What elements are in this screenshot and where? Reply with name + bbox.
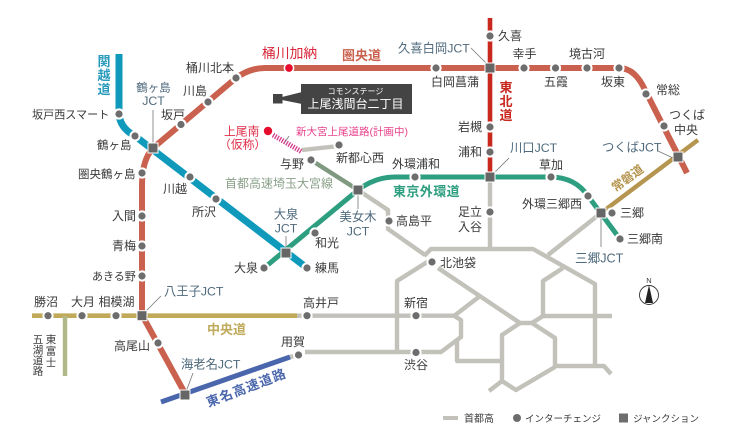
legend: ジャンクション	[633, 414, 699, 425]
interchange labels: 川島	[183, 83, 207, 98]
line: Tohoku Expressway	[488, 18, 492, 177]
interchange labels: あきる野	[92, 270, 136, 283]
route names: 関	[97, 54, 111, 69]
line: Kan-Etsu Expressway	[119, 54, 307, 268]
interchange labels: 大泉	[234, 261, 258, 275]
route names: 越	[97, 68, 111, 83]
route names: 路	[33, 364, 44, 378]
interchange labels: 久喜	[498, 29, 522, 43]
junction labels: つくばJCT	[602, 140, 662, 154]
junction labels: JCT	[142, 94, 165, 108]
route names: 道	[97, 82, 111, 97]
route names: 富	[46, 344, 56, 358]
junction labels: 大泉	[274, 206, 298, 222]
junction labels	[136, 40, 662, 372]
route names: 中央道	[207, 322, 246, 337]
junction labels: 久喜白岡JCT	[398, 40, 470, 56]
interchange labels: 三郷南	[627, 231, 663, 246]
interchange labels: 外環浦和	[392, 157, 440, 171]
interchange labels: 和光	[315, 236, 339, 250]
interchange markers	[43, 31, 669, 360]
interchange labels: 高島平	[396, 213, 432, 228]
interchange labels: 坂東	[601, 75, 625, 89]
interchange labels: 新宿	[404, 296, 428, 310]
route names: 士	[46, 356, 56, 369]
interchange labels: 圏央鶴ヶ島	[78, 167, 136, 181]
interchange labels: 中央	[674, 122, 698, 137]
callout: Common Stage Ageo Asamadai 2-chome	[273, 84, 412, 114]
interchange labels: 三郷	[620, 206, 644, 220]
interchange labels: 相模湖	[98, 294, 135, 309]
legend	[443, 412, 699, 425]
route names: 道	[499, 108, 513, 123]
interchange labels: 岩槻	[458, 119, 482, 134]
line: Tomei Expressway	[161, 357, 290, 402]
interchange labels: 川越	[163, 182, 187, 196]
icon: north compass: N	[646, 276, 652, 285]
leader lines	[146, 48, 673, 392]
marker: Ageo-Minami IC	[264, 127, 272, 135]
route names: 首都高速埼玉大宮線	[225, 176, 333, 190]
interchange labels: 入間	[112, 209, 136, 223]
red and pink labels: 上尾南	[224, 124, 260, 138]
junction labels: JCT	[347, 224, 370, 238]
interchange labels: 境古河	[569, 46, 605, 61]
interchange labels: 高尾山	[114, 339, 150, 353]
interchange labels: 入谷	[458, 220, 482, 234]
junction labels: 美女木	[340, 210, 376, 224]
route names: 東京外環道	[393, 184, 460, 199]
icon: north compass	[640, 276, 658, 304]
legend: インターチェンジ	[525, 414, 601, 425]
line: Joban Expressway	[601, 140, 698, 213]
line: Ken-O Expressway	[142, 68, 687, 397]
interchange labels: 渋谷	[404, 358, 428, 372]
junction labels: 鶴ヶ島	[136, 80, 171, 94]
interchange labels: 常総	[656, 82, 680, 97]
route names: 圏央道	[342, 48, 381, 63]
interchange labels: 坂戸西スマート	[32, 108, 109, 122]
interchange labels: 北池袋	[440, 256, 476, 270]
legend: 首都高	[464, 412, 494, 425]
junction labels: JCT	[275, 222, 298, 236]
route names: 東	[499, 80, 513, 95]
interchange labels: 青梅	[112, 239, 136, 253]
junction labels: 川口JCT	[510, 141, 558, 155]
interchange labels: つくば	[669, 108, 705, 122]
red and pink labels: 桶川加納	[262, 46, 317, 61]
interchange labels: 新都心西	[336, 151, 384, 165]
route names: 東名高速道路	[204, 366, 289, 410]
line: Tokyo Gaikan	[264, 177, 620, 268]
interchange labels: 外環三郷西	[522, 197, 582, 211]
route names: 道	[33, 354, 44, 367]
line: Saitama Omiya route	[311, 160, 358, 190]
junction labels: 海老名JCT	[181, 356, 241, 372]
interchange labels: 用賀	[281, 335, 305, 349]
interchange labels: 鶴ヶ島	[97, 138, 132, 152]
junction labels: 八王子JCT	[164, 284, 224, 298]
interchange labels: 幸手	[512, 47, 537, 61]
interchange labels: 桶川北本	[186, 60, 234, 75]
interchange labels: 練馬	[315, 261, 339, 275]
red and pink labels	[219, 46, 408, 152]
interchange labels: 勝沼	[34, 294, 58, 309]
interchange labels: 五霞	[544, 75, 568, 89]
route names: 東	[46, 334, 56, 346]
callout: Common Stage Ageo Asamadai 2-chome: 上尾浅間台二丁目	[307, 96, 404, 111]
interchange labels: 白岡菖蒲	[431, 74, 479, 89]
marker: Okegawa-Kano IC	[284, 63, 294, 73]
interchange labels: 坂戸	[161, 108, 185, 122]
interchange labels: 草加	[539, 158, 563, 172]
interchange labels: 浦和	[458, 145, 482, 159]
route names: 湖	[33, 344, 43, 356]
interchange labels: 足立	[458, 205, 482, 219]
route names	[33, 48, 646, 410]
interchange labels: 大月	[71, 295, 95, 309]
line: Chuo Expressway	[32, 313, 297, 318]
interchange labels	[32, 29, 705, 372]
interchange labels: 高井戸	[303, 296, 339, 310]
callout: Common Stage Ageo Asamadai 2-chome: コモンステージ	[328, 87, 383, 96]
network: Shuto expressway	[290, 146, 612, 391]
route names: 北	[499, 94, 513, 109]
red and pink labels: 新大宮上尾道路(計画中)	[296, 125, 408, 138]
route names: 五	[33, 334, 43, 346]
line: planned Shin-Omiya Kamio road	[273, 135, 302, 152]
interchange labels: 与野	[280, 157, 304, 171]
line: Fuji Goko road	[63, 316, 67, 376]
red and pink labels: （仮称）	[219, 138, 266, 152]
route names: 常磐道	[608, 161, 646, 195]
junction markers	[137, 63, 683, 400]
interchange labels: 所沢	[192, 205, 216, 219]
junction labels: 三郷JCT	[575, 252, 624, 266]
